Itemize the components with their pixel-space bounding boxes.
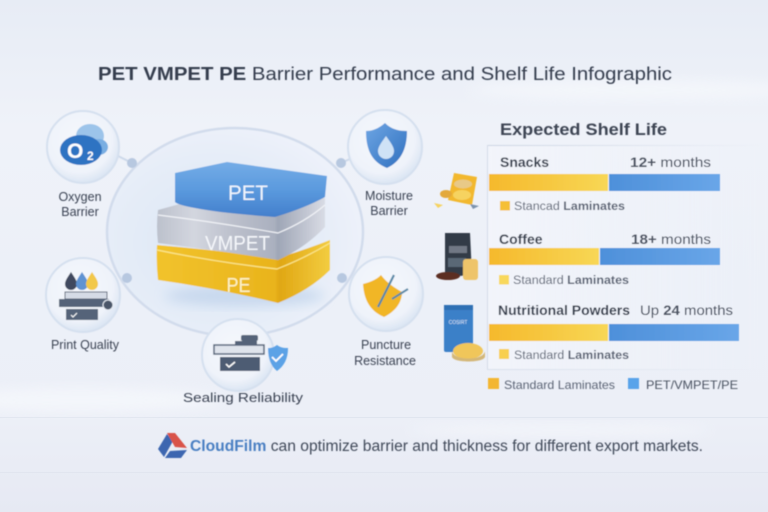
row: coffee: 18+ months <box>631 231 711 247</box>
footer callout <box>158 433 703 458</box>
row: snacks: 12+ months <box>630 154 711 170</box>
icon: yellow shield with needles <box>363 275 408 317</box>
title: PET VMPET PE Barrier Performance and Shelf Life Infographic <box>98 63 672 84</box>
layer: VMPET: VMPET <box>205 233 270 255</box>
feature: oxygen barrier: Oxygen <box>58 190 102 204</box>
layer: PET: PET <box>228 182 268 205</box>
icon: ink drops and printer <box>59 272 113 320</box>
layer: VMPET <box>157 190 325 260</box>
row: coffee: Standard Laminates <box>513 275 629 287</box>
feature: print quality <box>46 258 120 352</box>
feature: oxygen barrier <box>47 111 119 219</box>
feature: puncture resistance <box>349 257 423 368</box>
panel: shelf life chart <box>487 145 768 370</box>
feature: sealing reliability: Sealing Reliability <box>183 390 304 405</box>
icon: sealer with shield <box>214 335 288 371</box>
row: snacks: Stancad Laminates <box>514 201 625 213</box>
feature: print quality: Print Quality <box>51 338 120 352</box>
footer callout: CloudFilm can optimize barrier and thickness for different export markets. <box>190 438 703 455</box>
legend: Standard Laminates <box>504 378 615 392</box>
icon: O2 cloud <box>60 124 108 165</box>
icon: powder can <box>444 305 485 362</box>
legend <box>488 378 738 392</box>
layer: PET <box>175 162 327 217</box>
row: nutritional powders: Standard Laminates <box>514 350 629 362</box>
legend: PET/VMPET/PE <box>646 378 738 392</box>
feature: moisture barrier: Barrier <box>370 204 408 218</box>
row: snacks <box>489 154 720 213</box>
central ring diagram <box>107 128 363 336</box>
row: snacks: Snacks <box>500 154 549 170</box>
icon: shield with drop <box>366 123 407 168</box>
layer stack <box>157 162 330 306</box>
icon: coffee pack <box>436 233 478 280</box>
icon: CloudFilm logo <box>158 433 187 458</box>
row: coffee: Coffee <box>499 231 543 247</box>
feature: sealing reliability <box>183 319 304 405</box>
feature: puncture resistance: Resistance <box>354 354 416 368</box>
row: nutritional powders <box>489 303 739 362</box>
row: coffee <box>489 231 720 287</box>
icon: O2 cloud: O <box>67 140 83 163</box>
feature: moisture barrier <box>348 110 422 218</box>
icon: snack bag <box>434 173 479 209</box>
icon: O2 cloud: 2 <box>87 149 94 163</box>
row: nutritional powders: Up 24 months <box>640 303 733 318</box>
layer: PE: PE <box>226 275 250 297</box>
feature: moisture barrier: Moisture <box>365 189 413 203</box>
feature: oxygen barrier: Barrier <box>61 205 99 219</box>
feature: puncture resistance: Puncture <box>361 338 411 352</box>
row: nutritional powders: Nutritional Powders <box>498 303 630 318</box>
icon: powder can: COSIRT <box>449 320 467 326</box>
heading: expected shelf life: Expected Shelf Life <box>500 120 667 139</box>
layer: PE <box>157 240 330 303</box>
